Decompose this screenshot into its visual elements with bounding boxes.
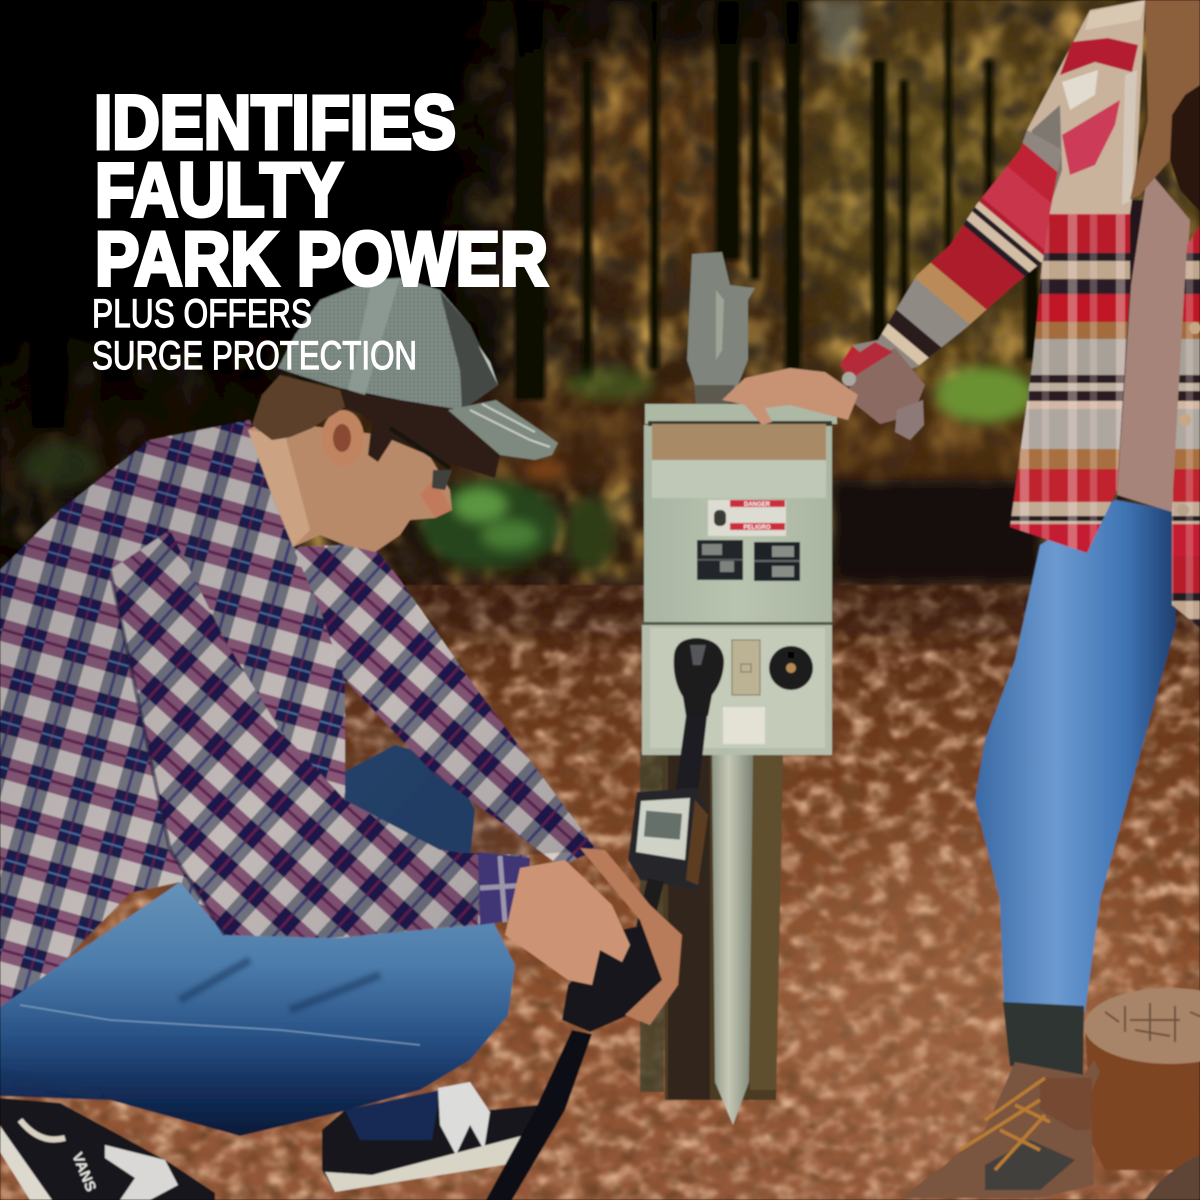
RV adapter plug [562,922,668,1032]
man: left shoe: VANS [68,1150,99,1194]
wooden post and conduit [640,752,783,1125]
sleeve [840,130,1062,385]
power pedestal box [642,404,837,755]
turned cuff [850,348,925,424]
subheading: SURGE PROTECTION [92,334,417,378]
shirt body [1010,212,1130,553]
man: hair [252,375,500,478]
man: right shoe [322,1082,540,1192]
woman: manhole cover [1084,988,1200,1170]
woman: taupe tee [1117,170,1190,512]
GFCI outlet [732,640,760,695]
man: trucker cap [278,278,558,460]
surge protector device [628,788,708,890]
danger label: PELIGRO [743,525,771,531]
lower panel [642,624,832,755]
headline: FAULTY [95,148,343,233]
left breakers [697,540,743,580]
man: back leg jeans [300,745,475,860]
subheading: PLUS OFFERS [92,292,312,336]
man: hands [505,848,682,1025]
copper reflection panel [652,424,826,460]
woman: dark gap beside shirt [1117,200,1150,500]
green bush behind the man [420,460,614,573]
surge protector plug and cable [486,638,724,1200]
headline: PARK POWER [95,217,548,302]
info sticker [723,707,765,744]
leaf covered ground [0,575,1200,1200]
subheading [92,292,417,378]
near sleeve [110,530,480,938]
woman: second boot [1145,1155,1200,1200]
right breakers [754,542,800,581]
man: jeans thigh [0,882,515,1136]
ear [322,410,364,466]
grey stump behind pedestal [687,252,755,404]
woman: jeans [975,500,1176,1012]
forest background [0,0,1200,600]
right shirt panel [1172,225,1200,628]
woman: boot [900,1060,1100,1198]
man: left shoe [0,1098,215,1200]
far sleeve [335,548,597,866]
danger label: DANGER [744,502,771,508]
man: glasses [390,428,452,490]
shirt yoke [1020,0,1145,214]
woman: wool sock [1003,1002,1084,1075]
30 amp receptacle [769,646,813,690]
woman: flannel shirt [840,0,1200,628]
cap brim [448,400,558,460]
man: neck and face [248,410,452,552]
woman: hand on box [722,368,858,425]
headline: IDENTIFIES [94,80,456,166]
shirt collar and chest [293,545,385,680]
headline [94,80,548,302]
man: plaid shirt [0,420,597,1007]
woman: long hair [1130,0,1200,212]
danger label [708,500,786,536]
lid [645,404,837,424]
dark vignette behind headline [0,0,500,400]
shirt shadow overlay [0,420,597,1007]
